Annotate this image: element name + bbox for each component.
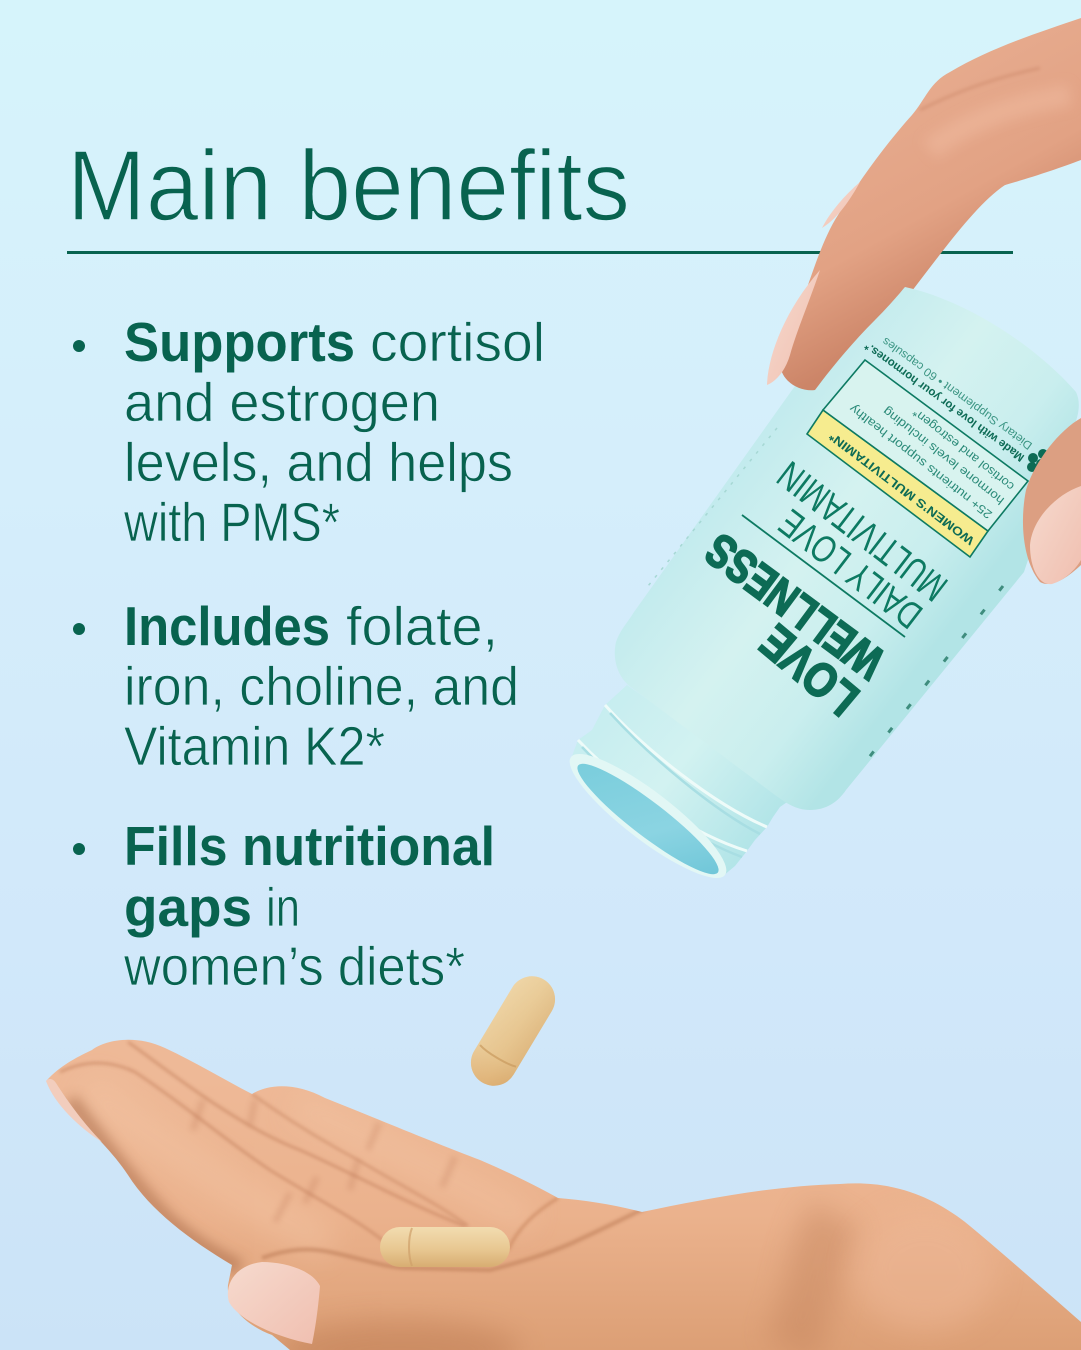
benefit: cortisol and estrogen — [73, 311, 545, 553]
lower hand — [46, 1040, 1081, 1350]
benefit: folate, iron, choline: folate, — [346, 595, 498, 657]
label box text: cortisol and estrogen* — [909, 405, 1017, 494]
nail: thumb — [1030, 486, 1081, 584]
nail: thumb — [228, 1262, 320, 1344]
benefit: cortisol and estrogen: levels, and helps — [124, 431, 513, 493]
benefit: nutritional gaps: gaps — [124, 876, 252, 938]
benefit: folate, iron, choline: Includes — [124, 595, 330, 657]
tagline text: Dietary Supplement • 60 capsules — [880, 334, 1035, 451]
label seam marks — [648, 428, 777, 586]
tagline text: Made with love for your hormones.* — [862, 339, 1027, 463]
nail: index finger — [767, 270, 820, 385]
brand: WELLNESS: WELLNESS — [695, 523, 894, 690]
thenar boundary — [508, 1198, 558, 1250]
back of hand highlight — [866, 1243, 982, 1326]
benefit: cortisol and estrogen: cortisol — [370, 311, 545, 373]
thumb top edge shadow — [262, 1208, 645, 1270]
benefit: cortisol and estrogen: Supports — [124, 311, 355, 373]
bottle opening — [556, 738, 740, 894]
bottle body — [615, 287, 1079, 810]
knuckle marks — [193, 1100, 455, 1222]
label rule — [742, 515, 905, 637]
benefit: cortisol and estrogen: and estrogen — [124, 371, 440, 433]
label box text: hormone levels including — [880, 404, 1007, 508]
icon: clover logo — [1027, 449, 1048, 472]
yellow label band — [807, 410, 988, 557]
capsule in palm — [380, 1227, 510, 1267]
nail: outer finger — [46, 1079, 102, 1142]
finger highlights — [231, 1189, 322, 1246]
third finger boundary — [252, 1094, 468, 1226]
benefit: nutritional gaps — [73, 815, 495, 997]
upper hand: back fingers behind bottle — [808, 18, 1081, 300]
benefit: cortisol and estrogen: with PMS* — [123, 491, 340, 553]
capsule cap seam — [479, 1045, 516, 1069]
finger highlight — [295, 1105, 530, 1222]
label box text: 25+ nutrients support healthy — [847, 402, 995, 522]
capsule seam — [409, 1228, 412, 1266]
hand band shade — [790, 1215, 835, 1350]
benefit: folate, iron, choline: iron, choline, and — [124, 655, 519, 717]
knuckle highlight — [930, 95, 1070, 150]
shadow along outer finger edge — [70, 1100, 240, 1268]
front finger boundary — [60, 1063, 385, 1242]
title: Main benefits — [67, 130, 630, 242]
lower palm shade — [280, 1320, 520, 1350]
label box text — [847, 402, 1017, 522]
label box — [823, 360, 1028, 531]
upper hand: thumb — [1023, 418, 1081, 584]
benefits list — [73, 311, 545, 997]
benefit: folate, iron, choline — [73, 595, 519, 777]
product name: DAILY LOVE: DAILY LOVE — [772, 501, 930, 636]
second finger boundary — [128, 1042, 465, 1226]
benefit: folate, iron, choline: Vitamin K2* — [124, 715, 385, 777]
band text: WOMEN’S MULTIVITAMIN* — [826, 429, 977, 548]
label seam marks — [867, 586, 1003, 760]
brand: LOVE: LOVE — [751, 614, 869, 725]
bottle neck — [572, 685, 790, 876]
upper hand: index finger — [767, 40, 1081, 390]
benefit: nutritional gaps: in — [266, 876, 300, 938]
falling capsule — [462, 968, 564, 1094]
benefit: nutritional gaps: Fills nutritional — [124, 815, 495, 877]
product name: MULTIVITAMIN: MULTIVITAMIN — [770, 452, 955, 609]
icon: medicine bottle — [556, 287, 1079, 894]
benefit: nutritional gaps: women’s diets* — [123, 935, 465, 997]
knuckle creases — [920, 68, 1040, 110]
bottle neck threads — [578, 705, 767, 857]
nail: back finger — [822, 182, 860, 228]
title rule — [67, 251, 1013, 254]
